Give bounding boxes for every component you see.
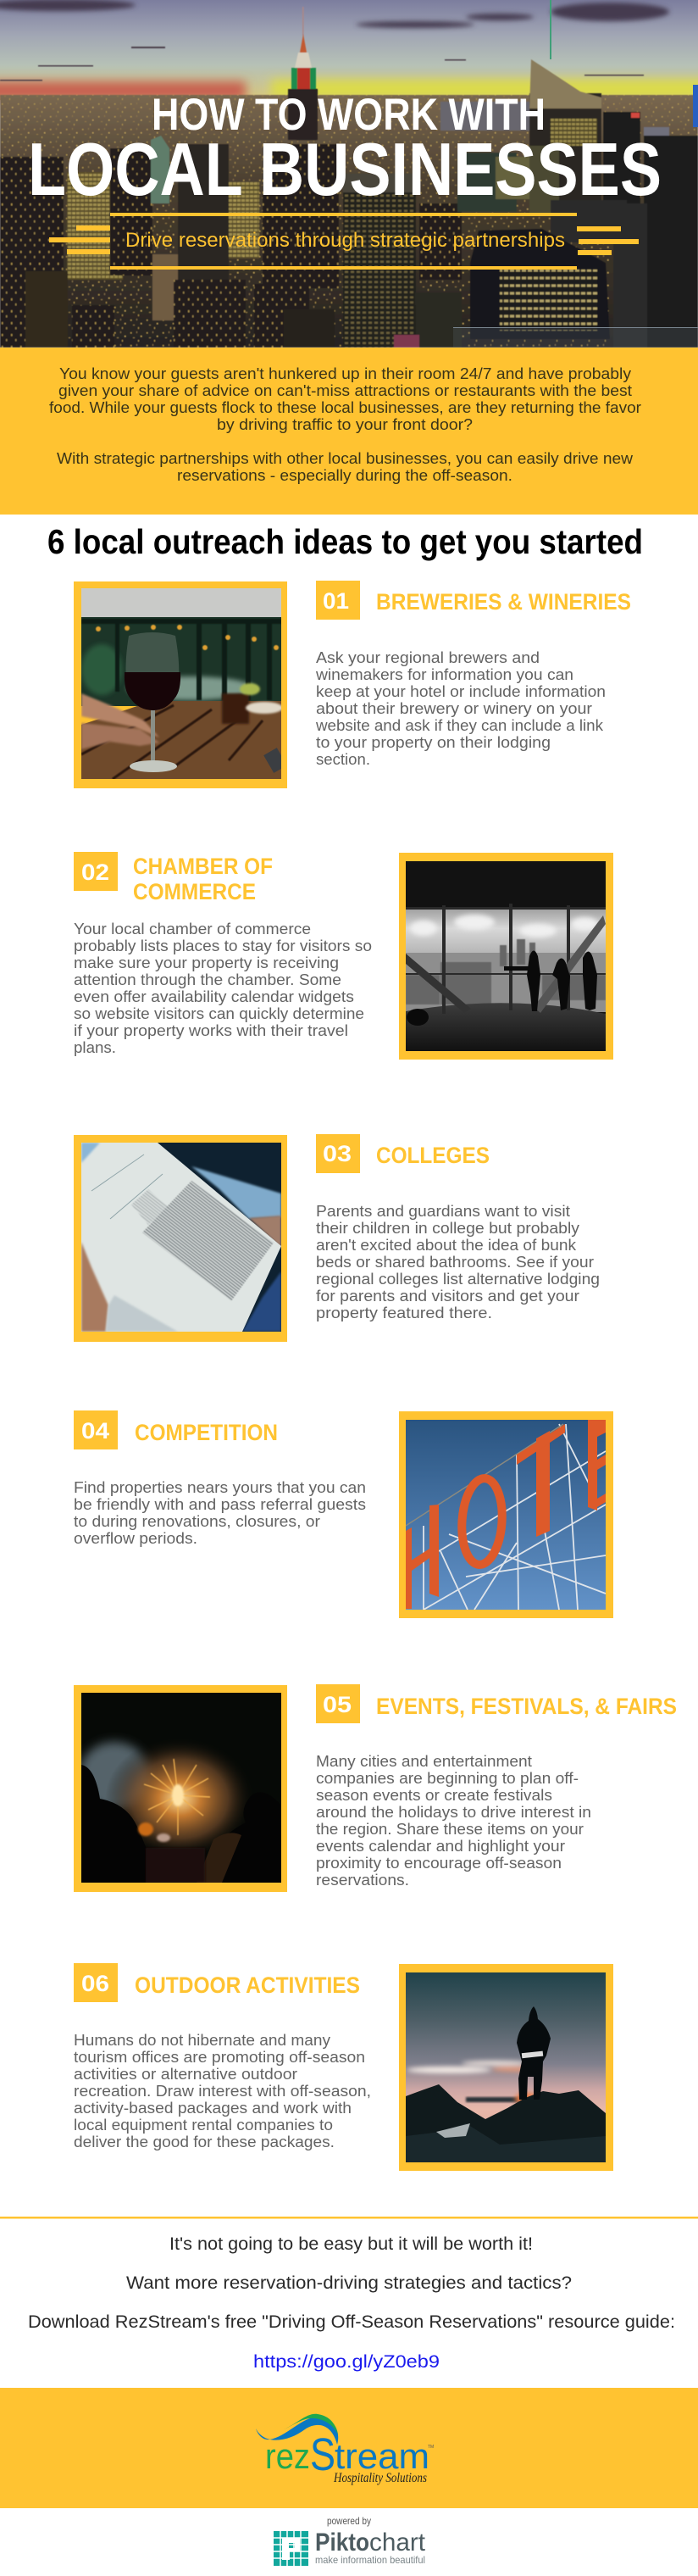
panel: intro band: You know your guests aren't hunkered up in their room 24/7 and have probably	[59, 365, 631, 382]
footer: powered by Piktochart: chart	[369, 2529, 426, 2557]
body text: winemakers for information you can	[315, 666, 573, 683]
body text: Parents and guardians want to visit	[316, 1203, 570, 1220]
body text: plans.	[74, 1039, 116, 1056]
body text: property featured there.	[316, 1305, 492, 1321]
body text: for parents and visitors and get your	[316, 1288, 579, 1305]
footer: powered by Piktochart	[274, 2515, 426, 2566]
panel: idea 01 breweries and wineries	[74, 581, 631, 788]
number badge	[316, 1684, 360, 1723]
heading: OUTDOOR ACTIVITIES	[135, 1972, 360, 1998]
number badge: 02	[81, 860, 109, 885]
body text: if your property works with their travel	[74, 1022, 348, 1039]
number badge	[74, 1410, 118, 1449]
body text: to during renovations, closures, or	[74, 1513, 320, 1530]
body text: aren't excited about the idea of bunk	[316, 1237, 577, 1254]
number badge: 05	[323, 1692, 352, 1717]
panel: intro band	[0, 348, 698, 515]
heading: CHAMBER OF	[133, 854, 273, 879]
body text: overflow periods.	[74, 1530, 197, 1547]
body text: tourism offices are promoting off-season	[74, 2049, 365, 2066]
body text: their children in college but probably	[316, 1220, 579, 1237]
photo: hiker on summit	[399, 1964, 613, 2171]
body text: Your local chamber of commerce	[74, 921, 311, 937]
body text: proximity to encourage off-season	[316, 1855, 562, 1872]
logo: rezStream	[256, 2414, 434, 2485]
subtitle with yellow bars	[49, 213, 639, 270]
number badge	[74, 1963, 118, 2002]
panel: intro band: food. While your guests flock to these local businesses, are they returning the favor	[49, 399, 641, 416]
body text: regional colleges list alternative lodging	[316, 1271, 600, 1288]
divider rule	[0, 2217, 698, 2219]
closing call to action: It's not going to be easy but it will be worth it!	[169, 2234, 533, 2254]
body text	[316, 1203, 600, 1321]
panel: intro band: With strategic partnerships with other local businesses, you can easily drive new	[57, 450, 634, 467]
distant water	[440, 102, 529, 131]
title: HOW TO WORK WITH	[152, 90, 546, 140]
footer: powered by Piktochart: powered by	[327, 2515, 371, 2527]
body text: recreation. Draw interest with off-season,	[74, 2083, 371, 2100]
subtitle with yellow bars: Drive reservations through strategic partnerships	[125, 229, 565, 252]
body text: around the holidays to drive interest in	[316, 1804, 591, 1821]
body text: deliver the good for these packages.	[74, 2134, 335, 2150]
body text: so website visitors can quickly determine	[74, 1005, 364, 1022]
footer: powered by Piktochart: make information beautiful	[315, 2554, 425, 2566]
photo: office silhouettes	[399, 853, 613, 1060]
number badge	[316, 581, 360, 620]
body text: make sure your property is receiving	[74, 954, 339, 971]
body text: keep at your hotel or include information	[316, 683, 606, 700]
closing call to action	[28, 2234, 675, 2372]
closing call to action: Download RezStream's free "Driving Off-Season Reservations" resource guide:	[28, 2312, 675, 2332]
body text: reservations.	[316, 1872, 409, 1889]
link: https://goo.gl/yZ0eb9	[253, 2352, 440, 2372]
body text	[74, 1479, 366, 1547]
body text: activities or alternative outdoor	[74, 2066, 297, 2083]
body text	[316, 1753, 591, 1889]
heading: COMMERCE	[133, 879, 256, 904]
panel: intro band: given your share of advice on can't-miss attractions or restaurants with the best	[58, 382, 632, 399]
body text: the region. Share these items on your	[316, 1821, 584, 1838]
body text: beds or shared bathrooms. See if your	[316, 1254, 594, 1271]
logo: rezStream: TM	[428, 2445, 434, 2450]
body text: companies are beginning to plan off-	[316, 1770, 579, 1787]
body text: activity-based packages and work with	[74, 2100, 352, 2117]
panel: idea 06 outdoor activities	[74, 1963, 613, 2171]
body text: attention through the chamber. Some	[74, 971, 341, 988]
body text: section.	[316, 751, 370, 768]
heading: COMPETITION	[135, 1420, 278, 1445]
logo: rezStream: rez	[265, 2436, 310, 2476]
panel: logo band	[0, 2388, 698, 2508]
body text: probably lists places to stay for visitors so	[74, 937, 372, 954]
body text: events calendar and highlight your	[316, 1838, 565, 1855]
Empire State Building	[288, 7, 317, 140]
panel: idea 05 events festivals fairs	[74, 1684, 677, 1892]
photo: hotel sign	[399, 1411, 613, 1618]
heading	[133, 854, 273, 904]
number badge: 04	[81, 1418, 109, 1444]
logo: rezStream: S	[310, 2429, 335, 2480]
body text: be friendly with and pass referral guests	[74, 1496, 366, 1513]
heading: COLLEGES	[376, 1143, 490, 1168]
body text	[74, 921, 372, 1056]
green antenna	[550, 0, 551, 59]
body text: about their brewery or winery on your	[316, 700, 592, 717]
body text: Humans do not hibernate and many	[74, 2032, 330, 2049]
logo: rezStream: Hospitality Solutions	[333, 2471, 427, 2485]
panel: idea 03 colleges	[74, 1134, 600, 1342]
body text: Many cities and entertainment	[316, 1753, 532, 1770]
panel: idea 02 chamber of commerce	[74, 852, 613, 1060]
logo: rezStream: tream	[335, 2436, 429, 2476]
panel: intro band: reservations - especially during the off-season.	[177, 467, 512, 484]
panel: idea 04 competition	[74, 1410, 613, 1618]
number badge: 01	[323, 588, 349, 614]
body text: website and ask if they can include a link	[315, 717, 604, 734]
icon: Piktochart mark	[274, 2531, 308, 2566]
photo: open book	[74, 1135, 287, 1342]
heading: EVENTS, FESTIVALS, & FAIRS	[376, 1694, 677, 1719]
body text	[74, 2032, 371, 2150]
panel: intro band: by driving traffic to your front door?	[217, 416, 473, 433]
photo: wine glass	[74, 581, 287, 788]
footer: powered by Piktochart: Pikto	[315, 2529, 369, 2557]
hero: city skyline photo	[0, 0, 698, 348]
title	[28, 90, 662, 211]
body text: Ask your regional brewers and	[316, 649, 540, 666]
section heading: 6 local outreach ideas to get you started	[47, 522, 643, 561]
body text: local equipment rental companies to	[74, 2117, 333, 2134]
number badge: 03	[323, 1141, 352, 1166]
photo: fireworks	[74, 1685, 287, 1892]
body text: season events or create festivals	[316, 1787, 552, 1804]
body text: Find properties nears yours that you can	[74, 1479, 366, 1496]
closing call to action: Want more reservation-driving strategies and tactics?	[126, 2273, 572, 2293]
heading: BREWERIES & WINERIES	[376, 589, 631, 615]
number badge	[74, 852, 118, 891]
body text	[315, 649, 606, 768]
body text: to your property on their lodging	[316, 734, 551, 751]
number badge	[316, 1134, 360, 1173]
body text: even offer availability calendar widgets	[74, 988, 354, 1005]
number badge: 06	[81, 1971, 109, 1996]
